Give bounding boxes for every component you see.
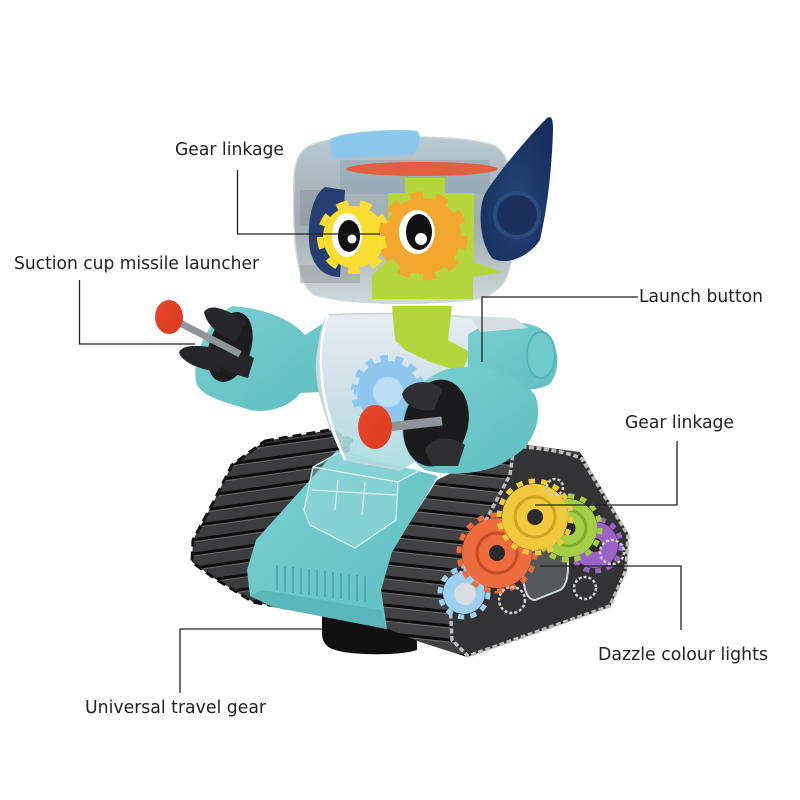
label: gear linkage right: Gear linkage [625, 413, 734, 433]
grey interior bands [300, 160, 490, 283]
teal chassis [247, 450, 438, 629]
left caterpillar track [192, 430, 352, 608]
robot head [294, 117, 553, 303]
orange gear eye [382, 195, 464, 277]
missile rod [388, 421, 442, 427]
right caterpillar track [380, 443, 628, 657]
transparent hood cover [304, 453, 420, 548]
missile rod [178, 322, 240, 354]
blue gear [440, 569, 488, 617]
yellow gear [499, 481, 571, 553]
label: launch button: Launch button [639, 287, 763, 307]
green neck [392, 306, 470, 372]
missile barrels [179, 307, 254, 378]
gear side panel [440, 446, 628, 656]
label: suction cup missile launcher: Suction cup missile launcher [14, 254, 260, 274]
callout lines [80, 170, 681, 693]
red suction cup [155, 300, 183, 334]
clear torso edge [321, 315, 345, 460]
green mechanism [372, 178, 502, 299]
clear head shell [294, 137, 514, 303]
label: gear linkage top: Gear linkage [175, 140, 284, 160]
label: universal travel gear: Universal travel gear [85, 698, 267, 718]
orange gear [459, 515, 535, 591]
top blue button [330, 130, 420, 158]
red suction cup [358, 405, 392, 449]
red disc [346, 162, 498, 176]
navy ear fin [481, 117, 553, 261]
yellow gear eye [320, 203, 388, 271]
vent grille [277, 565, 365, 602]
ear dial [495, 193, 539, 237]
front arm launcher [358, 367, 538, 474]
purple gear [569, 519, 621, 571]
clear small gears [499, 479, 624, 613]
label: dazzle colour lights: Dazzle colour lights [598, 645, 768, 665]
robot torso [317, 306, 486, 470]
blue torso gear [354, 358, 422, 426]
universal travel wheel [322, 612, 417, 654]
missile barrels [402, 382, 465, 466]
rear shoulder [468, 316, 557, 390]
left arm launcher [155, 300, 325, 411]
robot toy illustration [155, 117, 628, 657]
green gear [536, 496, 600, 560]
navy inner ring [309, 187, 345, 277]
